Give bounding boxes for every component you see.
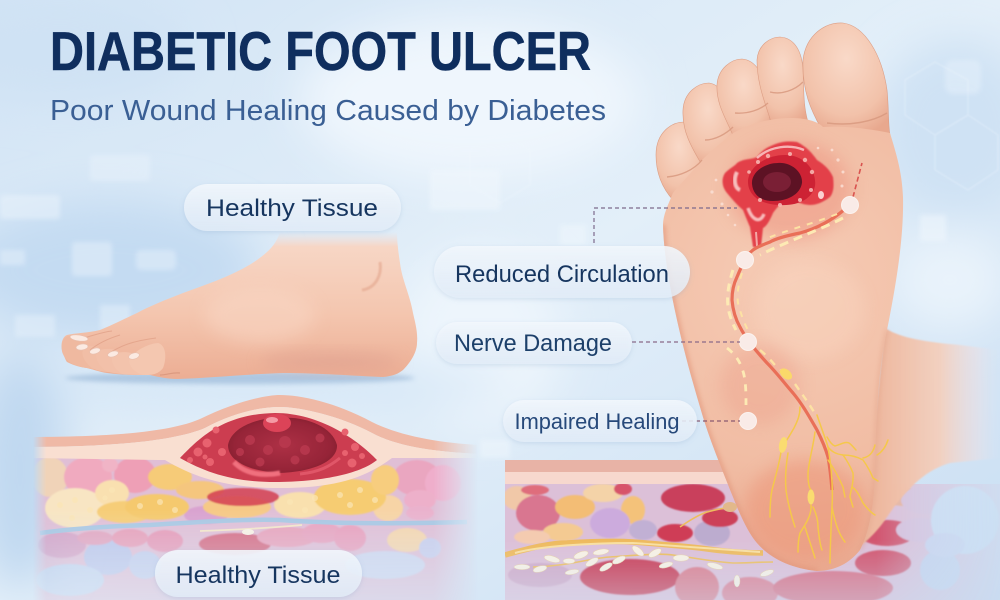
pill: nerve damage	[436, 322, 632, 364]
ulcer wound	[710, 141, 844, 247]
pill: healthy tissue top	[184, 184, 401, 231]
tissue blobs	[503, 483, 1000, 600]
toe creases	[667, 82, 887, 177]
panel: right tissue	[503, 460, 1000, 600]
leader line: reduced circulation	[594, 208, 737, 243]
pill: healthy tissue bottom	[155, 550, 362, 597]
pill: nerve damage: Nerve Damage	[454, 330, 612, 357]
callout nodes	[736, 196, 858, 430]
leader line: nerve damage	[632, 341, 740, 343]
subtitle: Poor Wound Healing Caused by Diabetes	[50, 95, 606, 127]
illustration: plantar foot with ulcer and nerves	[656, 23, 1000, 571]
nerve and circulation pathways	[727, 163, 888, 563]
nerve bundle	[505, 541, 763, 555]
subcutaneous tissue layer	[30, 457, 480, 600]
pill: reduced circulation	[434, 246, 690, 298]
toes of side foot	[62, 331, 165, 375]
leg and ankle	[862, 328, 1000, 545]
title: DIABETIC FOOT ULCER	[50, 20, 591, 82]
skin layers	[505, 460, 745, 472]
skin layer	[30, 395, 480, 454]
fat clusters	[45, 464, 399, 528]
sole shading	[663, 140, 865, 571]
wound cavity	[180, 413, 377, 482]
illustration: side view of foot	[62, 232, 417, 384]
pill: impaired healing	[503, 400, 697, 442]
leader line: impaired healing	[682, 420, 740, 422]
toes	[656, 23, 890, 200]
pill: impaired healing: Impaired Healing	[514, 409, 680, 434]
pill: healthy tissue bottom: Healthy Tissue	[176, 562, 340, 589]
sole	[663, 118, 903, 571]
pill: healthy tissue top: Healthy Tissue	[206, 195, 378, 222]
pill: reduced circulation: Reduced Circulation	[455, 261, 669, 288]
panel: wound cross-section	[30, 395, 480, 600]
nerve stripe	[40, 520, 467, 533]
soft heel edge	[860, 330, 887, 550]
